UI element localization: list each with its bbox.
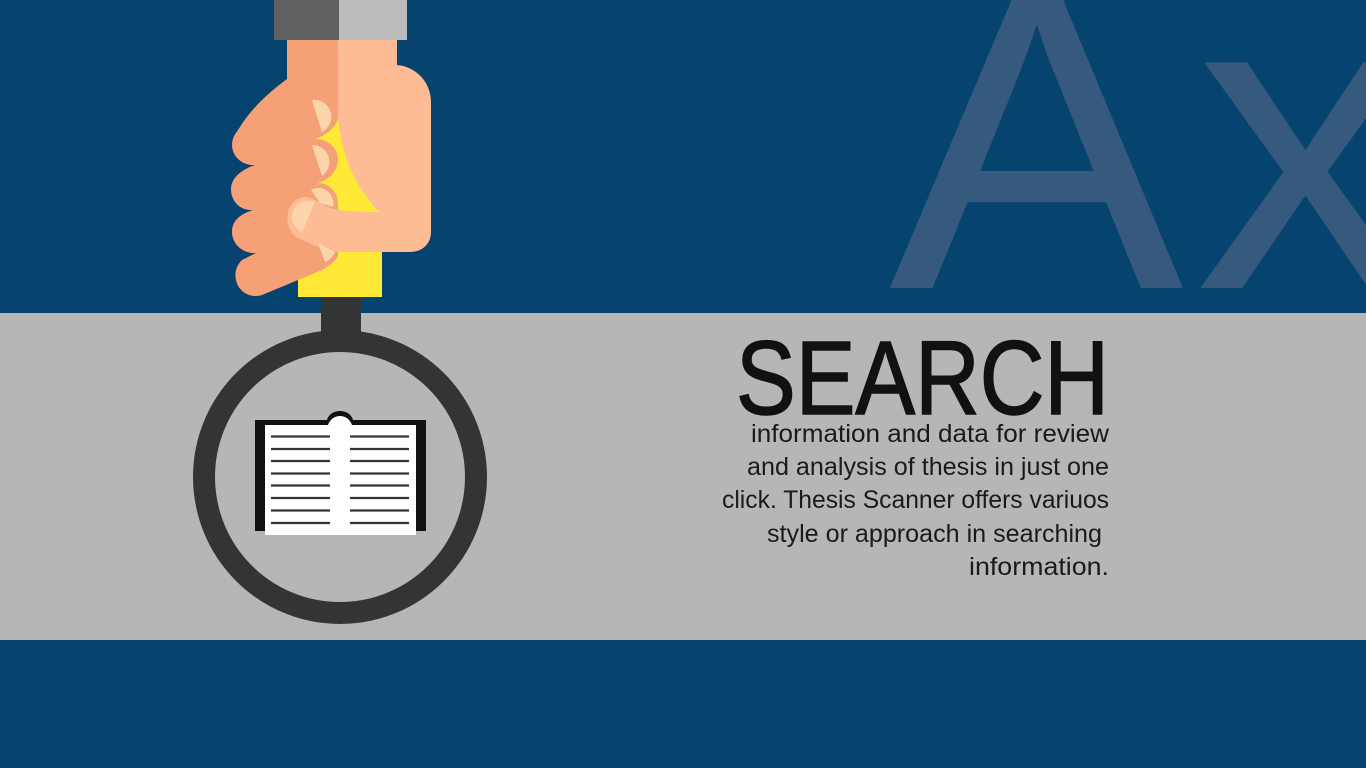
book pages	[265, 416, 416, 535]
handle stem	[321, 296, 361, 332]
palm and thumb	[287, 40, 431, 252]
body text: information and data for review	[751, 420, 1110, 448]
book cover	[255, 411, 426, 531]
lens ring	[204, 341, 476, 613]
body text: and analysis of thesis in just one	[747, 453, 1109, 481]
fingers	[231, 40, 338, 296]
fingernails	[292, 100, 335, 262]
yellow handle	[298, 118, 382, 297]
body text	[722, 420, 1110, 581]
grey middle band	[0, 313, 1366, 640]
body text: style or approach in searching	[767, 520, 1102, 548]
icon: hand gripping handle	[231, 0, 431, 296]
top navy band	[0, 0, 1366, 313]
body text: click. Thesis Scanner offers variuos	[722, 486, 1109, 514]
heading: SEARCH	[736, 320, 1109, 437]
bottom navy band	[0, 640, 1366, 768]
icon: open book	[255, 411, 426, 535]
shirt cuff	[274, 0, 407, 40]
body text: information.	[969, 553, 1109, 581]
text lines	[271, 436, 409, 523]
magnifying glass	[204, 118, 476, 613]
